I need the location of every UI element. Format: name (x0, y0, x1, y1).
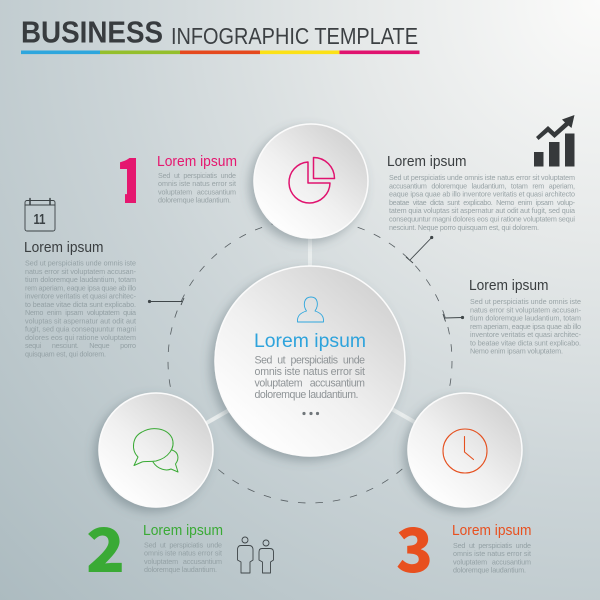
block 3 body: voluptatem accusantium (453, 558, 531, 566)
lower right body: tium doloremque laudantium, totam (470, 314, 581, 322)
leader: lower right text (443, 314, 464, 322)
text block 2 (143, 523, 223, 574)
text block 2: Lorem ipsum (143, 523, 223, 539)
connector bars (203, 235, 418, 425)
text block: left: Lorem ipsum (24, 240, 104, 256)
text block: lower right: Lorem ipsum (469, 278, 548, 294)
block 2 body: voluptatem accusantium (144, 557, 222, 566)
block 3 body: omnis iste natus error sit (453, 549, 531, 558)
left body (25, 258, 137, 358)
centre heading: Lorem ipsum (254, 330, 366, 352)
text block: upper right (387, 154, 576, 232)
upper right body: eaque ipsa quae ab illo inventore veritatis et quasi architecto (389, 190, 575, 199)
text block 1: Lorem ipsum (157, 154, 237, 170)
text block: lower right (469, 278, 582, 356)
upper right body: Sed ut perspiciatis unde omnis iste natus error sit voluptatem (389, 173, 575, 182)
text block 3: Lorem ipsum (452, 523, 532, 539)
colour bar under title (21, 50, 420, 54)
left body: sequi nesciunt. Neque porro (25, 341, 136, 350)
upper right body: nesciunt. Neque porro quisquam est, qui dolorem. (389, 223, 539, 232)
centre body text: omnis iste natus error sit (254, 366, 365, 378)
left body: inventore veritatis et quasi architec- (25, 292, 137, 300)
number 1: 1 (115, 131, 146, 221)
ellipsis dots (302, 412, 319, 415)
block 1 body: doloremque laudantium. (158, 196, 231, 204)
upper right body: tatem quia voluptas sit aspernatur aut odit aut fugit, sed quia (389, 206, 575, 215)
centre disc (215, 266, 405, 456)
left body: Nemo enim ipsam voluptatem quia (25, 308, 136, 317)
block 1 body: Sed ut perspiciatis unde (158, 171, 236, 180)
block 3 body (453, 541, 531, 574)
left body: Sed ut perspiciatis unde omnis iste (25, 258, 136, 268)
lower right body (470, 297, 582, 356)
disc 2 with chat icon (99, 393, 213, 507)
centre body text: doloremque laudantium. (254, 389, 358, 401)
left body: fugit, sed quia consequuntur magni (25, 324, 136, 334)
left body: to beatae vitae dicta sunt explicabo. (25, 300, 136, 309)
block 2 body: Sed ut perspiciatis unde (144, 540, 222, 550)
left body: rem aperiam, eaque ipsa quae ab illo (25, 283, 136, 292)
text block 1 (157, 154, 237, 204)
lower right body: to beatae vitae dicta sunt explicabo. (470, 338, 581, 347)
block 1 body (158, 171, 236, 204)
left body: quisquam est, qui dolorem. (25, 349, 106, 358)
left body: natus error sit voluptatem accusan- (25, 267, 137, 276)
upper right body: beatae vitae dicta sunt explicabo. Nemo enim ipsam volup- (389, 198, 576, 207)
lower right body: inventore veritatis et quasi architec- (470, 330, 582, 339)
lower right body: Nemo enim ipsam voluptatem. (470, 346, 563, 356)
text block: upper right: Lorem ipsum (387, 154, 466, 170)
block 2 body (144, 540, 222, 574)
lower right body: rem aperiam, eaque ipsa quae ab illo (470, 322, 581, 331)
block 1 body: voluptatem accusantium (158, 188, 236, 196)
upper right body: consequuntur magni dolores eos qui ratione voluptatem sequi (389, 214, 575, 224)
disc 1 with pie chart icon (254, 124, 368, 238)
lower right body: Sed ut perspiciatis unde omnis iste (470, 297, 581, 306)
block 3 body: Sed ut perspiciatis unde (453, 541, 531, 550)
icon: calendar: 11 (34, 212, 46, 228)
icon: pie chart (289, 158, 334, 203)
number 2: 2 (86, 501, 125, 590)
icon: growth chart (534, 115, 574, 166)
block 2 body: omnis iste natus error sit (144, 548, 222, 558)
text block: left (24, 240, 137, 358)
title: BUSINESS (21, 14, 163, 50)
leader: left text (148, 298, 184, 305)
upper right body (389, 173, 576, 232)
centre body text (254, 354, 365, 401)
left body: dolores eos qui ratione voluptatem (25, 333, 136, 342)
upper right body: accusantium doloremque laudantium, totam rem aperiam, (389, 181, 575, 190)
block 2 body: doloremque laudantium. (144, 565, 217, 574)
number 3: 3 (396, 501, 433, 590)
icon: clock (443, 429, 487, 473)
icon: calendar (25, 198, 55, 231)
block 1 body: omnis iste natus error sit (158, 179, 236, 188)
title (21, 14, 418, 50)
icon: two people (238, 537, 274, 573)
text block 3 (452, 523, 532, 574)
leader: upper right text (406, 236, 433, 263)
centre body text: Sed ut perspiciatis unde (254, 354, 365, 366)
title: INFOGRAPHIC TEMPLATE (171, 23, 418, 49)
centre body text: voluptatem accusantium (254, 378, 365, 390)
icon: person (297, 297, 324, 322)
dashed ring (168, 219, 452, 503)
block 3 body: doloremque laudantium. (453, 566, 526, 574)
lower right body: natus error sit voluptatem accusan- (470, 305, 582, 314)
icon: chat bubbles (133, 429, 178, 472)
left body: voluptas sit aspernatur aut odit aut (25, 316, 136, 325)
left body: tium doloremque laudantium, totam (25, 275, 136, 284)
disc 3 with clock icon (408, 393, 522, 507)
